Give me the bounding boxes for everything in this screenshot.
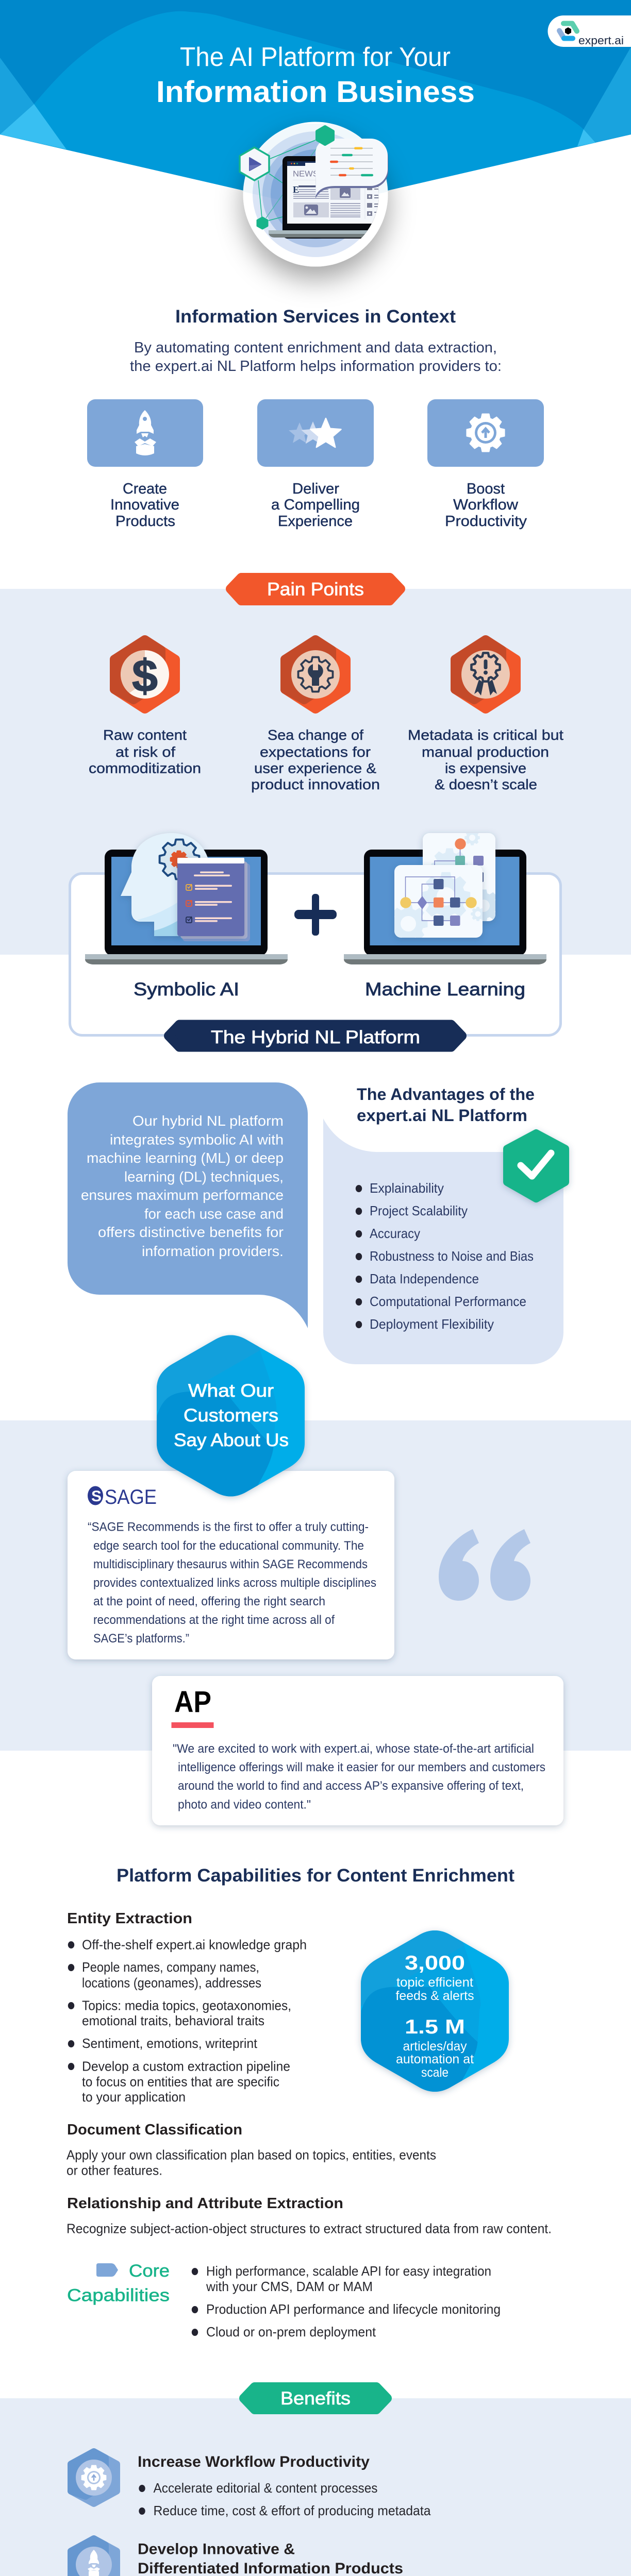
pain point label: raw content: Raw content <box>103 727 187 743</box>
card: deliver a compelling experience <box>257 399 374 467</box>
entity extraction heading: Entity Extraction <box>67 1910 192 1927</box>
card: AP testimonial <box>152 1676 563 1825</box>
benefit list: Reduce time, cost & effort of producing metadata <box>154 2503 431 2518</box>
AP quote text: "We are excited to work with expert.ai, whose state-of-the-art artificial <box>173 1742 534 1756</box>
labels: three goals: Boost <box>467 481 505 497</box>
logo: SAGE: S <box>91 1488 102 1505</box>
logo badge: expert.ai <box>578 34 624 47</box>
badge: what our customers say about us: What Our <box>188 1381 274 1401</box>
entity extraction list: to your application <box>82 2089 186 2105</box>
icon: plus sign <box>294 894 337 936</box>
stats hexagon: automation at <box>396 2052 474 2066</box>
core capabilities list: Production API performance and lifecycle monitoring <box>206 2301 501 2317</box>
section: document classification <box>67 2122 436 2178</box>
stats hexagon: 3,000 <box>405 1952 465 1974</box>
description text: ensures maximum performance <box>81 1187 284 1203</box>
description text: machine learning (ML) or deep <box>87 1150 284 1166</box>
entity extraction list: People names, company names, <box>82 1959 259 1975</box>
core capabilities heading: Capabilities <box>67 2285 170 2305</box>
icon: dollar hexagon: $ <box>132 650 158 701</box>
panel: testimonials background <box>0 1420 631 1751</box>
SAGE quote text: recommendations at the right time across all of <box>93 1613 335 1627</box>
icon: green check hexagon <box>507 1133 565 1198</box>
description text: for each use case and <box>144 1206 284 1222</box>
icon: rocket and box <box>135 410 156 455</box>
heading pill: benefits: Benefits <box>280 2388 351 2409</box>
labels: three goals: Productivity <box>445 513 527 530</box>
section: document classification: or other features. <box>67 2163 162 2178</box>
benefit: increase workflow productivity <box>71 2452 431 2518</box>
pain point label: sea change: product innovation <box>251 776 380 792</box>
entity extraction list <box>68 1937 307 2105</box>
advantages list items: Data Independence <box>370 1271 479 1286</box>
card: SAGE testimonial <box>68 1471 394 1659</box>
pain point label: sea change: Sea change of <box>268 727 363 743</box>
description text: integrates symbolic AI with <box>110 1131 284 1148</box>
SAGE quote text <box>88 1520 376 1646</box>
labels: three goals: a Compelling <box>271 497 360 513</box>
illustration: symbolic AI laptop <box>85 833 288 964</box>
logo: AP: AP <box>174 1685 211 1719</box>
entity extraction list: Topics: media topics, geotaxonomies, <box>82 1998 291 2013</box>
benefit list <box>139 2480 431 2518</box>
description text: learning (DL) techniques, <box>124 1168 284 1185</box>
title <box>156 42 475 109</box>
card: boost workflow productivity <box>427 399 544 467</box>
labels: three goals: Products <box>115 513 175 530</box>
title: Information Business <box>156 75 475 109</box>
card: create innovative products <box>87 399 203 467</box>
section: document classification: Document Classification <box>67 2122 242 2138</box>
pain point label: sea change <box>251 727 380 792</box>
advantages list items: Deployment Flexibility <box>370 1316 494 1332</box>
panel: header banner <box>0 0 631 207</box>
advantages list items <box>356 1180 534 1332</box>
advantages list items: Accuracy <box>370 1226 420 1241</box>
badge: what our customers say about us: Say About Us <box>174 1430 289 1450</box>
panel: hybrid platform frame <box>70 874 561 1036</box>
stats hexagon <box>358 1924 509 2099</box>
pain point label: metadata: is expensive <box>445 760 526 776</box>
core capabilities list <box>192 2263 501 2340</box>
hero illustration: laptop with news page <box>240 122 388 267</box>
labels: three goals: Workflow <box>453 497 519 513</box>
heading: platform capabilities: Platform Capabilities for Content Enrichment <box>117 1866 514 1886</box>
icon: award hexagon <box>455 640 516 709</box>
advantages list items: Computational Performance <box>370 1294 526 1309</box>
entity extraction list: emotional traits, behavioral traits <box>82 2013 264 2028</box>
icon: stars <box>289 418 341 447</box>
intro text: By automating content enrichment and data extraction, <box>134 340 497 356</box>
description text <box>81 1113 284 1259</box>
badge: what our customers say about us: Customers <box>184 1405 278 1426</box>
advantages heading <box>357 1085 535 1125</box>
labels: three goals: Experience <box>278 513 353 530</box>
labels: three goals: Deliver <box>292 481 339 497</box>
logo badge <box>548 15 631 47</box>
title: The AI Platform for Your <box>180 42 451 72</box>
heading pill: pain points <box>230 578 401 601</box>
section: relationship and attribute extraction <box>67 2195 552 2236</box>
benefit heading: Increase Workflow Productivity <box>138 2453 370 2470</box>
SAGE quote text: SAGE’s platforms.” <box>93 1632 189 1646</box>
stats hexagon: articles/day <box>403 2039 467 2054</box>
intro text <box>130 340 502 375</box>
entity extraction list: to focus on entities that are specific <box>82 2074 279 2090</box>
icon: blue hexagon gear <box>71 2452 117 2503</box>
AP quote text: photo and video content." <box>178 1798 311 1811</box>
section: core capabilities <box>67 2261 501 2340</box>
advantages heading: expert.ai NL Platform <box>357 1106 527 1125</box>
illustration: machine learning laptop <box>344 830 546 964</box>
core capabilities list: with your CMS, DAM or MAM <box>206 2279 373 2294</box>
benefit heading: Develop Innovative & <box>138 2541 295 2557</box>
heading pill: benefits <box>244 2387 387 2410</box>
SAGE quote text: at the point of need, offering the right search <box>93 1595 325 1608</box>
pain point label: metadata: manual production <box>422 744 549 760</box>
hero illustration: laptop with news page: NEWS <box>293 170 319 178</box>
section: relationship and attribute extraction: Relationship and Attribute Extraction <box>67 2195 343 2212</box>
section: relationship and attribute extraction: Recognize subject-action-object structures to extract structured data from raw content. <box>67 2221 552 2236</box>
labels: three goals: Innovative <box>110 497 179 513</box>
entity extraction list: Sentiment, emotions, writeprint <box>82 2036 258 2051</box>
pain point label: metadata: & doesn’t scale <box>435 776 537 792</box>
pain point label: metadata: Metadata is critical but <box>408 727 563 743</box>
advantages list items: Explainability <box>370 1180 444 1196</box>
SAGE quote text: provides contextualized links across multiple disciplines <box>93 1576 376 1590</box>
description text: Our hybrid NL platform <box>132 1113 284 1129</box>
core capabilities list: High performance, scalable API for easy integration <box>206 2263 491 2279</box>
icon: large quotation marks <box>439 1529 530 1601</box>
heading pill: the hybrid NL platform: The Hybrid NL Platform <box>211 1027 420 1047</box>
icon: gear wrench hexagon <box>285 640 346 709</box>
AP quote text <box>173 1742 545 1811</box>
benefit list: Accelerate editorial & content processes <box>154 2480 377 2496</box>
stats hexagon: 1.5 M <box>405 2016 465 2038</box>
stats hexagon: topic efficient <box>396 1975 473 1990</box>
panel: hybrid platform description <box>68 1082 308 1328</box>
heading pill: the hybrid NL platform <box>169 1024 462 1047</box>
AP quote text: intelligence offerings will make it easier for our members and customers <box>178 1760 545 1774</box>
icon: blue hexagon rocket <box>71 2539 117 2576</box>
pain point label: raw content: at risk of <box>115 744 175 760</box>
benefit heading <box>138 2541 403 2576</box>
pain point label: sea change: user experience & <box>254 760 376 776</box>
heading: information services in context: Information Services in Context <box>175 307 456 327</box>
pain point label: raw content: commoditization <box>89 760 201 776</box>
SAGE quote text: “SAGE Recommends is the first to offer a truly cutting- <box>88 1520 369 1534</box>
description text: information providers. <box>142 1243 284 1259</box>
entity extraction list: Develop a custom extraction pipeline <box>82 2059 290 2074</box>
advantages list items: Robustness to Noise and Bias <box>370 1248 534 1264</box>
section: document classification: Apply your own classification plan based on topics, entities, events <box>67 2147 436 2163</box>
labels: three goals <box>110 481 527 530</box>
pain point label: metadata <box>408 727 563 792</box>
pain point label: sea change: expectations for <box>260 744 371 760</box>
SAGE quote text: edge search tool for the educational community. The <box>93 1539 364 1553</box>
advantages heading: The Advantages of the <box>357 1085 535 1104</box>
core capabilities heading <box>67 2261 170 2305</box>
core capabilities heading: Core <box>129 2261 170 2281</box>
pain point label: raw content <box>89 727 201 776</box>
advantages list items: Project Scalability <box>370 1203 468 1218</box>
badge: what our customers say about us <box>154 1328 305 1503</box>
label: symbolic AI: Symbolic AI <box>134 979 239 999</box>
description text: offers distinctive benefits for <box>98 1224 284 1240</box>
labels: three goals: Create <box>123 481 167 497</box>
label: machine learning: Machine Learning <box>365 979 525 999</box>
stats hexagon: scale <box>421 2065 449 2080</box>
stats hexagon: feeds & alerts <box>396 1989 474 2003</box>
entity extraction list: locations (geonames), addresses <box>82 1975 261 1991</box>
heading pill: pain points: Pain Points <box>267 579 364 600</box>
logo: SAGE: SAGE <box>105 1486 157 1509</box>
icon: gear with arrow <box>467 414 504 451</box>
panel: benefits background <box>0 2398 631 2576</box>
SAGE quote text: multidisciplinary thesaurus within SAGE Recommends <box>93 1557 368 1571</box>
icon: tag <box>96 2263 118 2277</box>
AP quote text: around the world to find and access AP’s expansive offering of text, <box>178 1779 524 1793</box>
panel: advantages list <box>323 1085 565 1364</box>
benefit: develop innovative products <box>71 2539 403 2576</box>
intro text: the expert.ai NL Platform helps information providers to: <box>130 358 502 375</box>
entity extraction list: Off-the-shelf expert.ai knowledge graph <box>82 1937 307 1953</box>
section: entity extraction <box>67 1910 307 2105</box>
icon: dollar hexagon <box>114 640 175 709</box>
hero illustration: laptop with news page: E <box>293 184 299 195</box>
panel: pain points background <box>0 589 631 955</box>
core capabilities list: Cloud or on-prem deployment <box>206 2324 376 2340</box>
